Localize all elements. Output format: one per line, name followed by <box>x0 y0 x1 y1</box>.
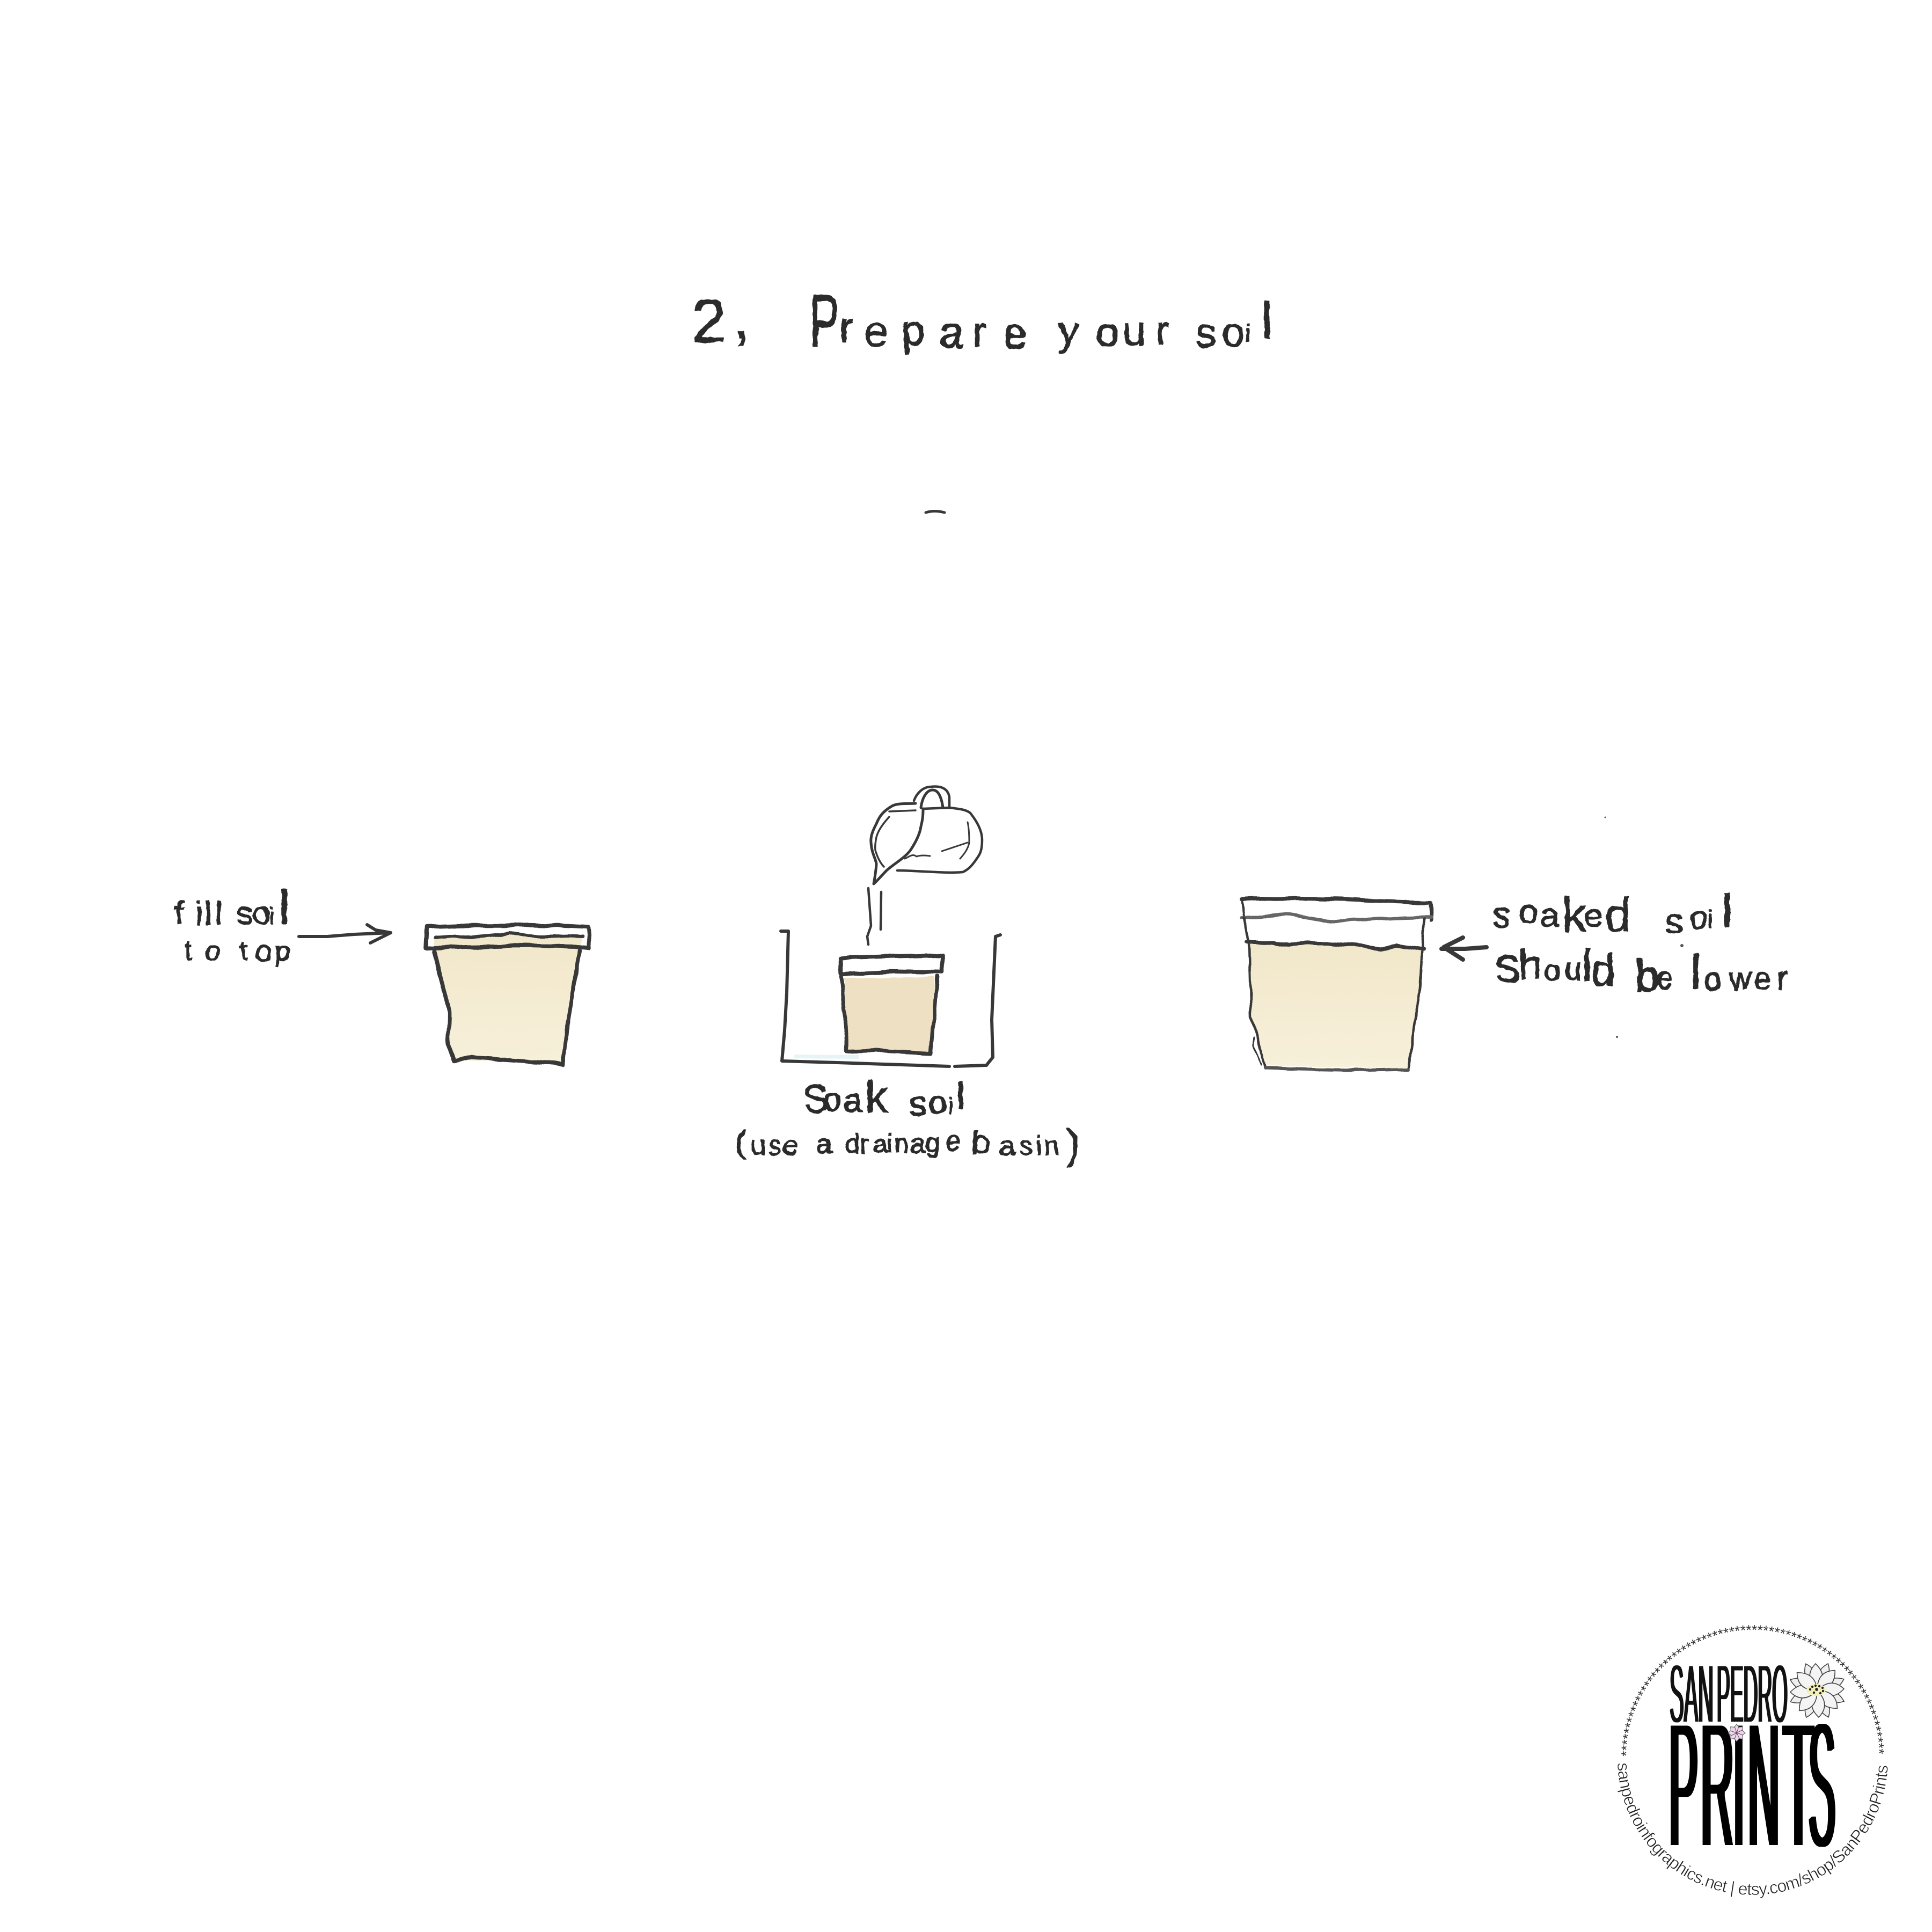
title: i <box>1245 320 1250 346</box>
ink specks <box>1605 817 1684 1038</box>
label: fill soil to top: fill so <box>175 895 270 931</box>
label: soak soil: i <box>948 1094 953 1119</box>
label: soaked soil should be lower: soaked <box>1492 888 1631 941</box>
title <box>692 279 1273 363</box>
watering jug pouring <box>871 787 982 884</box>
water tint in basin <box>794 1055 859 1059</box>
panel: soak soil <box>735 787 1080 1168</box>
logo curved web addresses: sanpedroinfographics.net | etsy.com/shop/SanPedroPrints <box>1618 1763 1888 1898</box>
panel: soaked soil lower <box>1241 817 1787 1070</box>
water stream <box>867 888 881 945</box>
label: soaked soil should be lower: l <box>1722 884 1733 938</box>
label: soak soil: so <box>909 1084 947 1124</box>
logo flower: small pink bloom <box>1728 1724 1745 1741</box>
pot filled to the top <box>426 925 590 1065</box>
logo flower: white bloom <box>1788 1662 1846 1719</box>
title: l <box>1261 292 1273 350</box>
label: use a drainage basin: drainage <box>845 1126 961 1159</box>
label: soaked soil should be lower <box>1492 884 1787 1001</box>
label: soaked soil should be lower: so <box>1665 899 1708 942</box>
label: soaked soil should be lower: lower <box>1690 946 1787 999</box>
label: soaked soil should be lower: i <box>1708 905 1713 933</box>
logo wordmark: San Pedro: SAN <box>1670 1648 1714 1741</box>
arrow: points to pot rim <box>299 925 391 943</box>
stray ink mark <box>926 511 945 513</box>
label: soaked soil should be lower: be <box>1635 950 1673 1001</box>
logo: San Pedro Prints badge <box>1618 1625 1888 1898</box>
label: soak soil <box>803 1072 965 1124</box>
title: P <box>809 279 839 363</box>
label: use a drainage basin: asin <box>999 1130 1059 1161</box>
logo wordmark: Prints: P <box>1669 1685 1698 1885</box>
label: use a drainage basin: use <box>750 1130 798 1161</box>
label: fill soil to top <box>175 881 290 967</box>
drainage basin <box>781 931 1000 1066</box>
large pot after soaking <box>1241 898 1431 1070</box>
title: 2, <box>692 283 750 355</box>
logo: San Pedro Prints badge: S <box>1809 1685 1835 1885</box>
label: fill soil to top: to top <box>184 935 290 967</box>
label: use a drainage basin: b <box>972 1124 990 1161</box>
label: fill soil to top: i <box>269 904 274 929</box>
logo: San Pedro Prints badge: T <box>1783 1685 1814 1885</box>
logo wordmark: Prints: N <box>1748 1685 1780 1885</box>
label: use a drainage basin: ) <box>1066 1121 1080 1168</box>
title: your so <box>1058 308 1245 356</box>
logo wordmark: Prints: R <box>1701 1685 1734 1885</box>
label: fill soil to top: l <box>279 881 290 935</box>
label: use a drainage basin: a <box>816 1126 833 1160</box>
arrow: points to lowered soil <box>1441 938 1487 960</box>
label: use a drainage basin: ( <box>735 1124 746 1160</box>
logo wordmark: Prints: I <box>1733 1685 1744 1885</box>
panel: fill soil to top <box>175 881 590 1065</box>
label: use a drainage basin <box>735 1121 1080 1168</box>
logo ring of asterisks: ********************************************************************** <box>1621 1625 1884 1756</box>
title: repare <box>839 304 1027 357</box>
label: soak soil: Soak <box>803 1072 888 1122</box>
small pot in basin <box>841 955 942 1053</box>
label: soak soil: l <box>956 1075 965 1117</box>
label: soaked soil should be lower: Should <box>1495 940 1615 994</box>
